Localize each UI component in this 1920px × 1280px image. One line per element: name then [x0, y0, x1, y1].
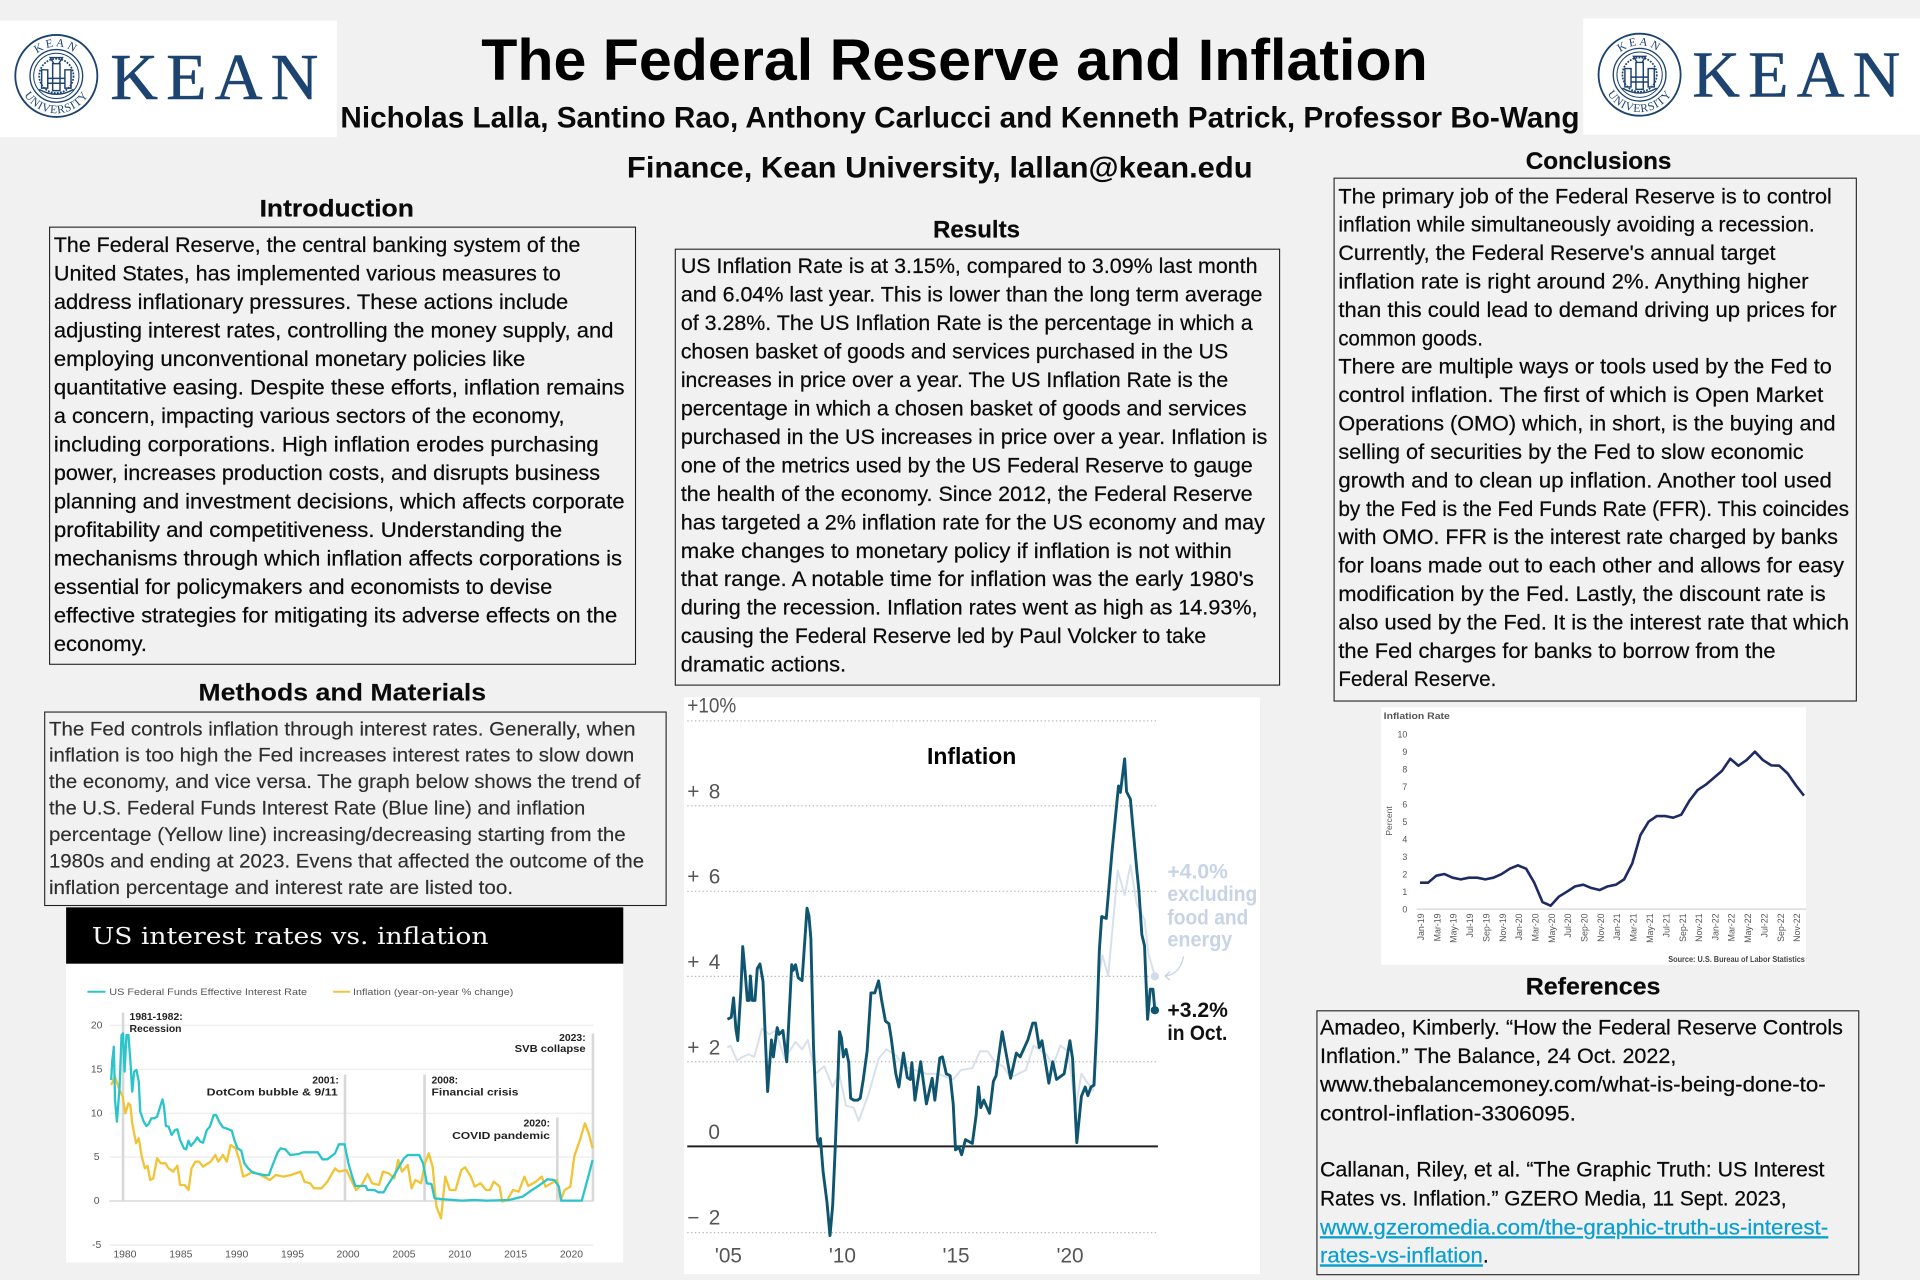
annotations: Financial crisis: [432, 1087, 519, 1098]
axis labels: [687, 695, 1084, 1267]
panel: introduction: [50, 196, 636, 664]
text: introduction body: quantitative easing. Despite these efforts, inflation remains: [54, 376, 624, 400]
text: results body: purchased in the US increases in price over a year. Inflation is: [681, 425, 1267, 449]
text: introduction body: address inflationary pressures. These actions include: [54, 290, 568, 314]
text: results body: of 3.28%. The US Inflation Rate is the percentage in which a: [681, 311, 1253, 335]
y axis labels: 15: [91, 1065, 103, 1076]
x axis labels: May-21: [1645, 913, 1655, 943]
text: introduction body: employing unconventional monetary policies like: [54, 347, 525, 371]
y axis labels: 6: [1402, 799, 1407, 809]
x axis labels: Mar-20: [1530, 913, 1540, 941]
text: conclusions body: Operations (OMO) which, in short, is the buying and: [1338, 412, 1836, 436]
text: methods body: the U.S. Federal Funds Interest Rate (Blue line) and inflation: [49, 798, 585, 820]
x axis labels: May-22: [1743, 913, 1753, 943]
panel: conclusions: [1334, 148, 1856, 701]
x axis labels: Nov-21: [1694, 913, 1704, 942]
logo: Kean University right: KEAN: [1616, 38, 1661, 52]
title: The Federal Reserve and Inflation: [481, 28, 1428, 93]
y axis labels: 5: [94, 1152, 100, 1163]
text: introduction body: effective strategies for mitigating its adverse effects on the: [54, 603, 617, 627]
y axis title: Percent: [1384, 806, 1394, 836]
text: introduction body: power, increases production costs, and disrupts business: [54, 461, 600, 485]
axis labels: '15: [942, 1244, 970, 1267]
y axis labels: -5: [92, 1240, 101, 1251]
annotations: 2008:: [432, 1076, 458, 1087]
text: references body: Rates vs. Inflation.” GZERO Media, 11 Sept. 2023,: [1320, 1186, 1787, 1210]
text: results body: increases in price over a year. The US Inflation Rate is the: [681, 368, 1228, 392]
heading: Conclusions: Conclusions: [1526, 148, 1671, 175]
panel: references: [1317, 973, 1859, 1275]
x axis labels: [113, 1249, 583, 1260]
text: references body: Callanan, Riley, et al. “The Graphic Truth: US Interest: [1320, 1158, 1825, 1182]
axis labels: + 2: [687, 1036, 720, 1059]
text: conclusions body: with OMO. FFR is the interest rate charged by banks: [1337, 525, 1838, 549]
text: conclusions body: The primary job of the Federal Reserve is to control: [1338, 184, 1832, 208]
text: conclusions body: control inflation. The first of which is Open Market: [1338, 383, 1823, 407]
x axis labels: 1980: [113, 1249, 137, 1260]
x axis labels: Jul-20: [1563, 913, 1573, 937]
y axis labels: 0: [94, 1196, 100, 1207]
x axis labels: Jul-19: [1465, 913, 1475, 937]
callout: excluding food and energy: [1167, 860, 1257, 952]
x axis labels: Sep-20: [1580, 913, 1590, 942]
source note: Source: U.S. Bureau of Labor Statistics: [1668, 955, 1805, 964]
chart title: Inflation Rate: Inflation Rate: [1384, 711, 1450, 721]
chart title: US interest rates vs. inflation: [92, 923, 489, 950]
x axis labels: Jul-22: [1760, 913, 1770, 937]
text: introduction body: profitability and competitiveness. Understanding the: [54, 518, 562, 542]
axis line: [1417, 908, 1806, 910]
callout: +3.2% in Oct.: in Oct.: [1167, 1021, 1227, 1045]
x axis labels: Nov-19: [1498, 913, 1508, 942]
text: conclusions body: [1337, 184, 1849, 691]
callout: +3.2% in Oct.: [1167, 998, 1228, 1045]
x axis labels: Nov-20: [1596, 913, 1606, 942]
text: results body: US Inflation Rate is at 3.15%, compared to 3.09% last month: [681, 254, 1258, 278]
text: results body: make changes to monetary policy if inflation is not within: [681, 539, 1232, 563]
text: references body: control-inflation-3306095.: [1320, 1101, 1576, 1125]
text: conclusions body: by the Fed is the Fed Funds Rate (FFR). This coincides: [1338, 497, 1849, 521]
text: methods body: 1980s and ending at 2023. Evens that affected the outcome of the: [49, 851, 644, 873]
text: references body: [1319, 1016, 1843, 1267]
legend: [87, 987, 513, 997]
box: introduction: [50, 227, 636, 664]
box: methods: [45, 712, 666, 906]
line: all items inflation: [727, 759, 1159, 1236]
text: results body: has targeted a 2% inflation rate for the US economy and may: [681, 510, 1265, 534]
text: introduction body: adjusting interest rates, controlling the money supply, and: [54, 319, 613, 343]
text: methods body: inflation is too high the Fed increases interest rates to slow down: [49, 745, 634, 767]
legend: US Federal Funds Effective Interest Rate: [109, 987, 307, 997]
callout: excluding food and energy: energy: [1167, 928, 1232, 952]
callout: excluding food and energy: +4.0%: [1167, 860, 1228, 884]
text: conclusions body: Federal Reserve.: [1338, 667, 1496, 691]
axis labels: '20: [1056, 1244, 1084, 1267]
annotations: 1981-1982:: [130, 1012, 183, 1023]
text: results body: and 6.04% last year. This is lower than the long term average: [681, 283, 1262, 307]
x axis labels: Jan-21: [1612, 913, 1622, 940]
axis labels: − 2: [687, 1206, 720, 1229]
legend: Inflation (year-on-year % change): [353, 987, 513, 997]
text: results body: chosen basket of goods and services purchased in the US: [681, 339, 1228, 363]
x axis labels: Jan-19: [1416, 913, 1426, 940]
y axis labels: 10: [1398, 730, 1407, 740]
box: results: [675, 249, 1280, 685]
text: results body: dramatic actions.: [681, 653, 846, 677]
y axis labels: 5: [1402, 817, 1407, 827]
text: methods body: the economy, and vice versa. The graph below shows the trend of: [49, 771, 641, 793]
y axis labels: 10: [91, 1108, 103, 1119]
x axis labels: 1995: [281, 1249, 304, 1260]
logo: Kean University left: UNIVERSITY: [26, 90, 87, 114]
annotations: Recession: [130, 1024, 182, 1035]
text: conclusions body: inflation while simultaneously avoiding a recession.: [1338, 213, 1815, 237]
logo: Kean University right: [1584, 18, 1920, 134]
y axis labels: 3: [1402, 852, 1407, 862]
y axis labels: 8: [1402, 765, 1407, 775]
text: introduction body: economy.: [54, 632, 147, 656]
logo: Kean University right: KEAN: [1692, 39, 1900, 112]
arrow: excluding food and energy: [1165, 956, 1183, 980]
logo: Kean University left: KEAN: [110, 41, 318, 114]
x axis labels: 2000: [336, 1249, 360, 1260]
text: results body: one of the metrics used by the US Federal Reserve to gauge: [681, 453, 1253, 477]
axis labels: '10: [829, 1244, 856, 1267]
text: conclusions body: There are multiple ways or tools used by the Fed to: [1338, 355, 1832, 379]
x axis labels: May-19: [1449, 913, 1459, 943]
callout: excluding food and energy: excluding: [1167, 882, 1257, 906]
x axis labels: 2010: [448, 1249, 472, 1260]
x axis labels: Sep-21: [1678, 913, 1688, 942]
x axis labels: Nov-22: [1792, 913, 1802, 942]
text: conclusions body: modification by the Fed. Lastly, the discount rate is: [1338, 582, 1826, 606]
annotations: [130, 1012, 586, 1142]
logo: Kean University left: KEAN: [33, 39, 78, 54]
text: conclusions body: selling of securities by the Fed to slow economic: [1338, 440, 1804, 464]
text: introduction body: including corporations. High inflation erodes purchasing: [54, 433, 599, 457]
chart: US interest rates vs inflation: [66, 907, 623, 1262]
panel: methods and materials: [45, 679, 666, 906]
x axis labels: [1416, 913, 1802, 943]
x axis labels: 2020: [560, 1249, 583, 1260]
text: conclusions body: Currently, the Federal Reserve's annual target: [1338, 241, 1776, 265]
text: references body: www.gzeromedia.com/the-graphic-truth-us-interest-: [1319, 1215, 1828, 1239]
x axis labels: Mar-19: [1432, 913, 1442, 941]
y axis labels: 20: [91, 1021, 103, 1032]
text: results body: during the recession. Inflation rates went as high as 14.93%,: [681, 596, 1258, 620]
text: references body: www.thebalancemoney.com/what-is-being-done-to-: [1319, 1072, 1826, 1096]
annotations: SVB collapse: [515, 1044, 586, 1055]
y axis labels: 4: [1402, 834, 1407, 844]
axis labels: + 4: [687, 951, 720, 974]
text: references body: rates-vs-inflation: [1320, 1243, 1483, 1267]
y axis labels: 2: [1402, 869, 1407, 879]
x axis labels: Jul-21: [1661, 913, 1671, 937]
x axis labels: Mar-22: [1727, 913, 1737, 941]
text: introduction body: essential for policymakers and economists to devise: [54, 575, 552, 599]
annotations: 2001:: [312, 1076, 339, 1087]
text: introduction body: a concern, impacting various sectors of the economy,: [54, 404, 564, 428]
heading: Methods and Materials: Methods and Materials: [198, 679, 486, 706]
heading: Results: Results: [933, 217, 1020, 244]
y axis labels: 0: [1402, 904, 1407, 914]
x axis labels: 1990: [225, 1249, 248, 1260]
text: introduction body: [54, 233, 624, 656]
y axis labels: 9: [1402, 747, 1407, 757]
x axis labels: Sep-19: [1481, 913, 1491, 942]
axis labels: + 8: [687, 780, 720, 803]
x axis labels: Sep-22: [1776, 913, 1786, 942]
text: methods body: The Fed controls inflation through interest rates. Generally, when: [49, 718, 636, 740]
axis labels: '05: [715, 1244, 742, 1267]
text: conclusions body: the Fed charges for banks to borrow from the: [1338, 639, 1776, 663]
chart title: Inflation: Inflation: [927, 743, 1016, 769]
text: introduction body: mechanisms through which inflation affects corporations is: [54, 546, 622, 570]
text: conclusions body: common goods.: [1338, 326, 1483, 350]
axis labels: +10%: [687, 695, 736, 718]
text: references body: Inflation.” The Balance, 24 Oct. 2022,: [1320, 1044, 1676, 1068]
affiliation: Finance, Kean University, lallan@kean.edu: [627, 152, 1253, 185]
text: results body: that range. A notable time for inflation was the early 1980's: [681, 567, 1254, 591]
x axis labels: 2015: [504, 1249, 527, 1260]
line: inflation: [111, 1077, 593, 1218]
text: methods body: inflation percentage and interest rate are listed too.: [49, 877, 513, 899]
text: results body: causing the Federal Reserve led by Paul Volcker to take: [681, 624, 1206, 648]
x axis labels: Mar-21: [1629, 913, 1639, 941]
text: conclusions body: growth and to clean up inflation. Another tool used: [1338, 468, 1832, 492]
annotations: 2020:: [523, 1119, 550, 1130]
text: methods body: [49, 718, 644, 899]
text: conclusions body: inflation rate is right around 2%. Anything higher: [1338, 269, 1809, 293]
axis labels: 0: [708, 1121, 720, 1144]
text: conclusions body: also used by the Fed. It is the interest rate that which: [1338, 610, 1849, 634]
y axis labels: 7: [1402, 782, 1407, 792]
y axis labels: 1: [1402, 887, 1407, 897]
heading: References: References: [1526, 973, 1660, 1000]
text: results body: percentage in which a chosen basket of goods and services: [681, 396, 1247, 420]
x axis labels: 2005: [392, 1249, 416, 1260]
heading: Introduction: Introduction: [260, 196, 414, 223]
x axis labels: May-20: [1547, 913, 1557, 943]
box: conclusions: [1334, 178, 1856, 701]
text: introduction body: planning and investment decisions, which affects corporate: [54, 489, 624, 513]
chart: Inflation: [684, 695, 1260, 1274]
text: results body: the health of the economy. Since 2012, the Federal Reserve: [681, 482, 1253, 506]
panel: results: [675, 217, 1280, 685]
authors: Nicholas Lalla, Santino Rao, Anthony Carlucci and Kenneth Patrick, Professor Bo-Wang: [340, 101, 1580, 134]
annotations: 2023:: [559, 1033, 586, 1044]
x axis labels: 1985: [169, 1249, 193, 1260]
annotations: DotCom bubble & 9/11: [207, 1087, 338, 1098]
box: references: [1317, 1011, 1859, 1275]
line: inflation rate: [1420, 752, 1804, 906]
text: methods body: percentage (Yellow line) increasing/decreasing starting from the: [49, 824, 626, 846]
line: federal funds rate: [111, 1033, 593, 1201]
text: results body: [681, 254, 1267, 677]
text: introduction body: The Federal Reserve, the central banking system of the: [54, 233, 580, 257]
text: introduction body: United States, has implemented various measures to: [54, 262, 561, 286]
x axis labels: Jan-22: [1710, 913, 1720, 940]
y axis labels: [1398, 730, 1407, 914]
axis labels: + 6: [687, 865, 720, 888]
x axis labels: Jan-20: [1514, 913, 1524, 940]
logo: Kean University right: UNIVERSITY: [1608, 89, 1670, 112]
y axis labels: [91, 1021, 103, 1251]
line: excluding food and energy: [727, 865, 1159, 1121]
annotations: COVID pandemic: [452, 1131, 550, 1142]
chart: Inflation Rate: [1381, 707, 1806, 965]
callout: +3.2% in Oct.: +3.2%: [1167, 998, 1228, 1022]
text: conclusions body: than this could lead to demand driving up prices for: [1338, 298, 1837, 322]
logo: Kean University left: [0, 21, 336, 137]
text: references body: Amadeo, Kimberly. “How the Federal Reserve Controls: [1320, 1016, 1843, 1040]
text: conclusions body: for loans made out to each other and allows for easy: [1338, 554, 1844, 578]
callout: excluding food and energy: food and: [1167, 905, 1248, 929]
text: references body: .: [1483, 1243, 1489, 1267]
